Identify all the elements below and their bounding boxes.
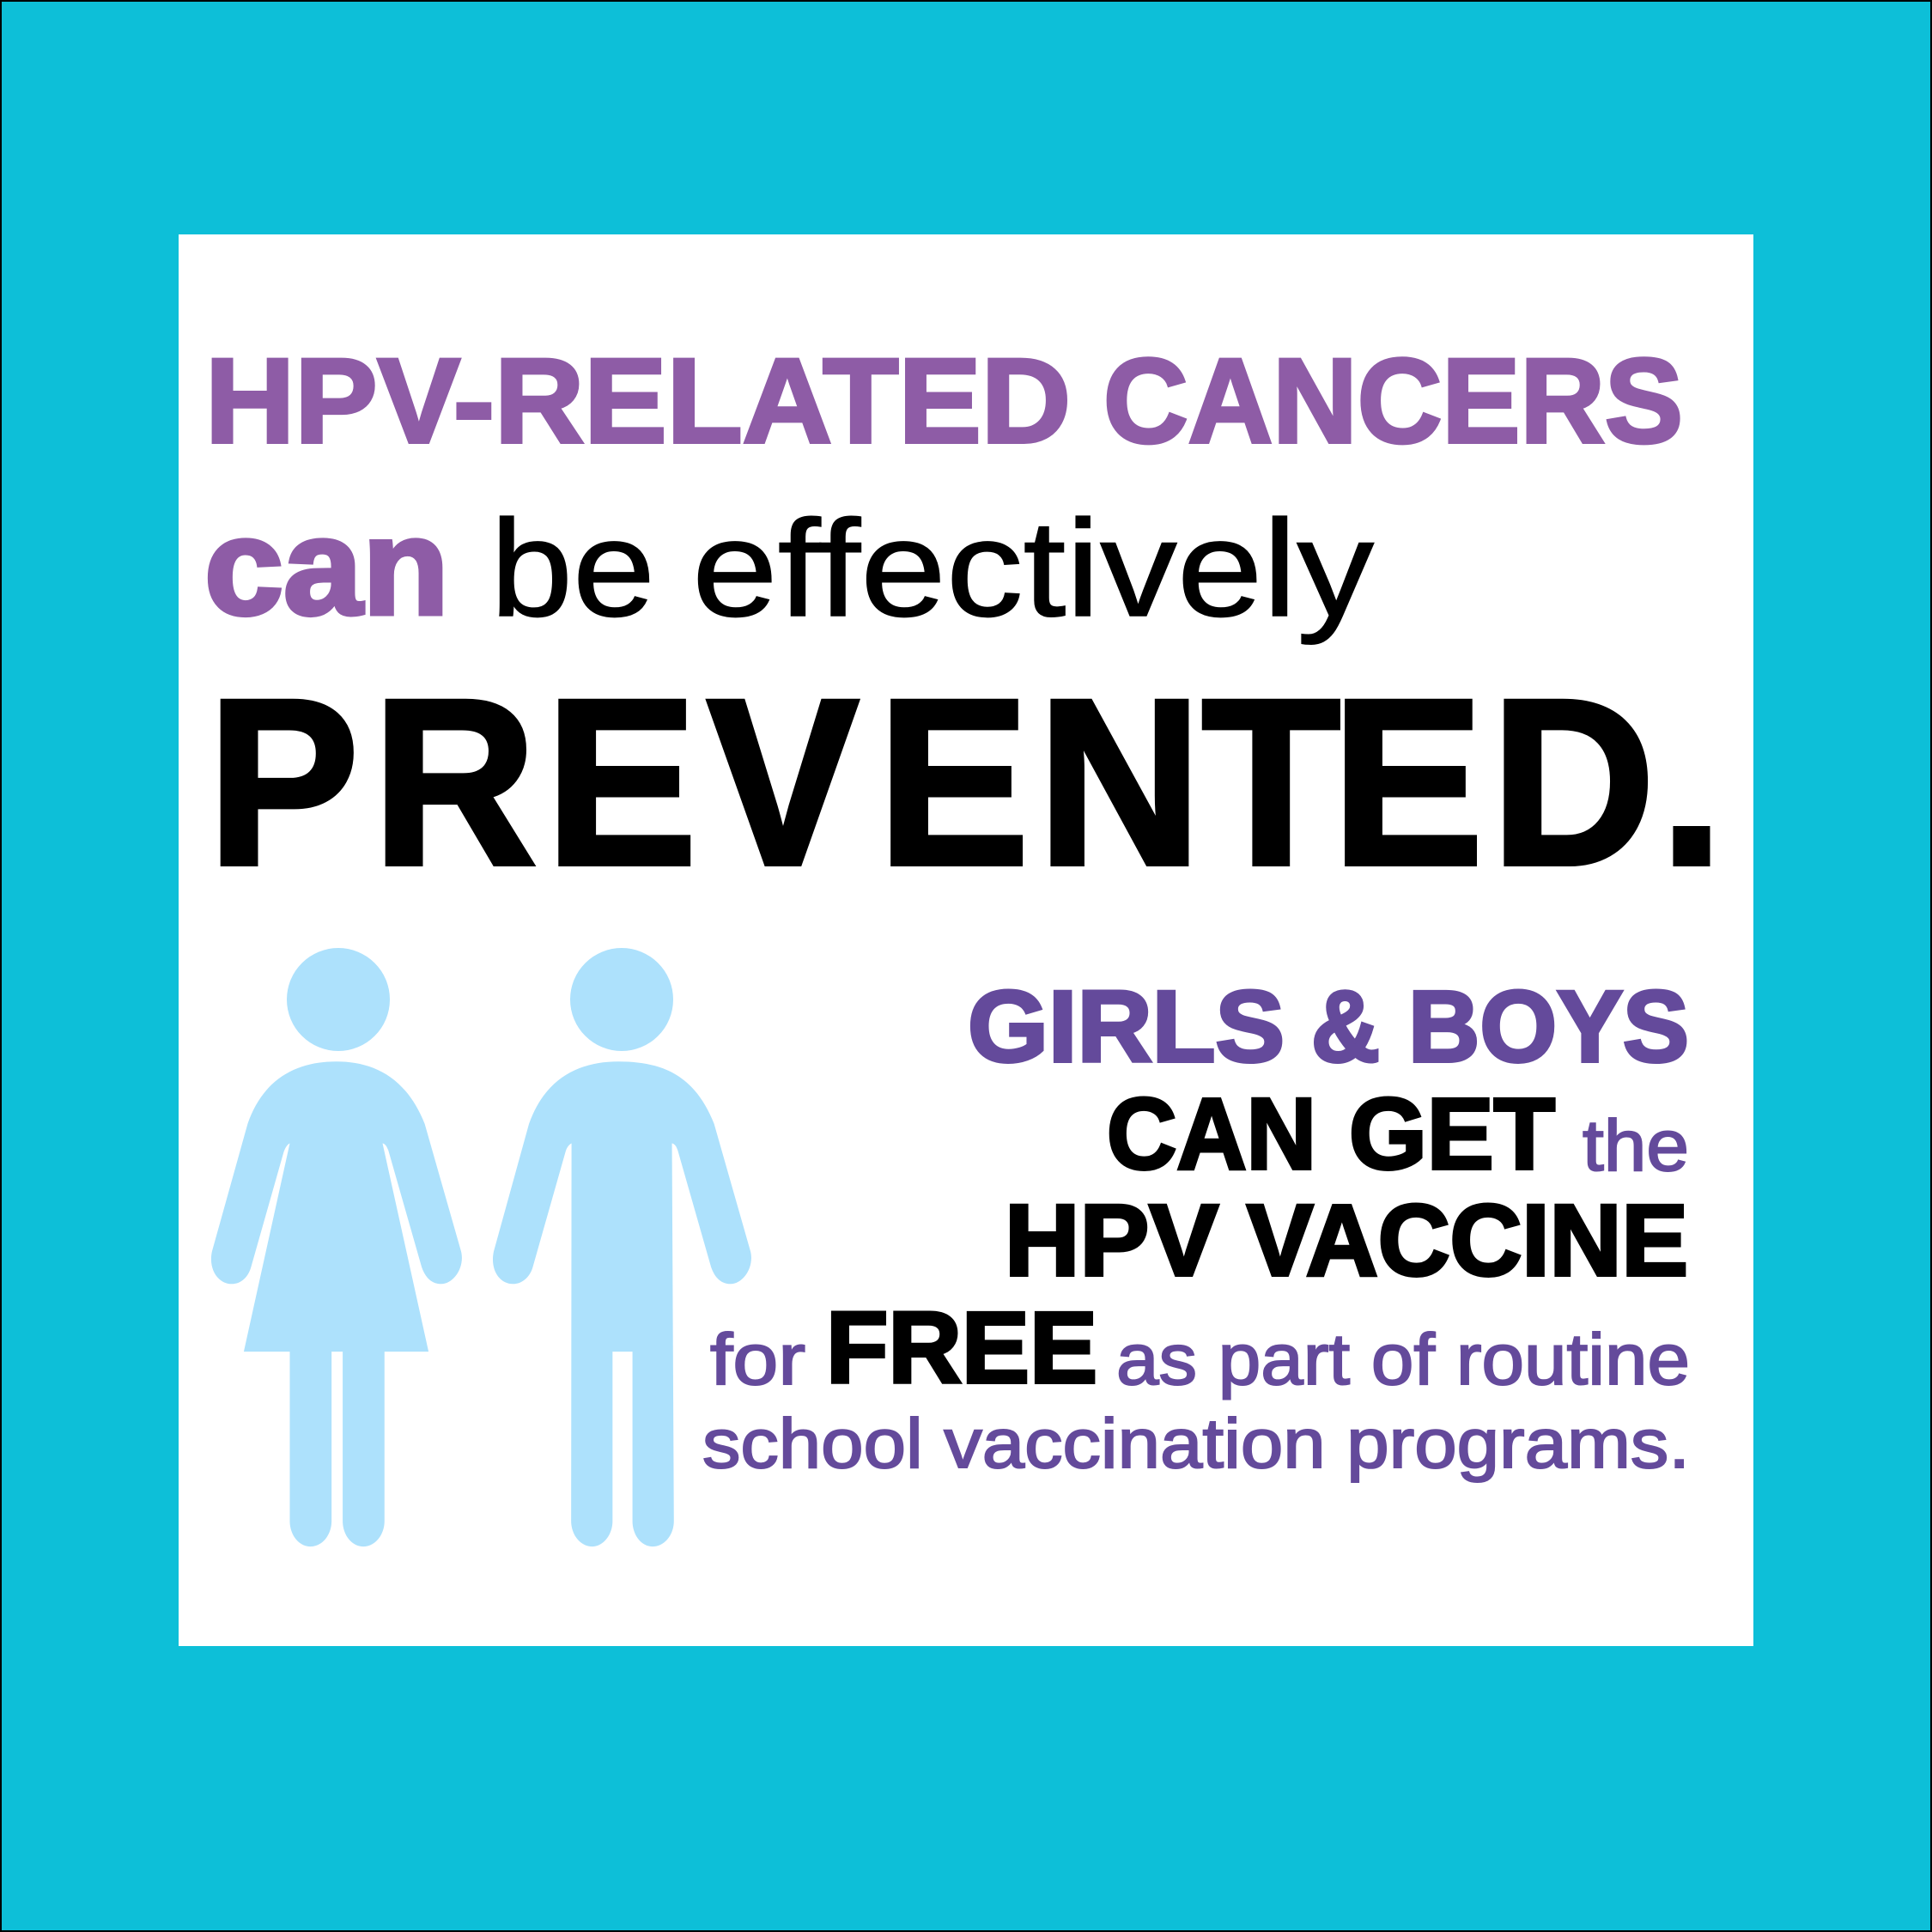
text: HPV vaccine — [1005, 1184, 1688, 1297]
heading: HPV-related cancers — [205, 333, 1683, 468]
heading: can be effectively — [204, 489, 1374, 645]
heading: can be effectively: can — [204, 489, 449, 643]
text: girls and boys: BOYS — [1408, 970, 1689, 1084]
panel: white card — [179, 234, 1753, 1646]
text: for free as part of routine — [710, 1291, 1690, 1405]
heading: can be effectively: be — [490, 491, 655, 645]
text: for free as part of routine: FREE — [826, 1291, 1097, 1405]
text: can get the: GET — [1349, 1078, 1555, 1191]
text: for free as part of routine: as part of routine — [1116, 1319, 1690, 1400]
icon: boy figure — [493, 948, 751, 1546]
text: girls and boys: GIRLS — [968, 970, 1285, 1084]
heading: can be effectively: effectively — [692, 491, 1374, 645]
text: HPV vaccine: HPV — [1005, 1184, 1218, 1297]
text: girls and boys: & — [1311, 970, 1380, 1084]
heading: HPV-related cancers: HPV-RELATED — [205, 333, 1071, 468]
heading: HPV-related cancers: CANCERS — [1103, 333, 1683, 468]
text: for free as part of routine: for — [710, 1319, 805, 1400]
icon: girl and boy figures — [211, 948, 751, 1546]
text: can get the: the — [1583, 1105, 1689, 1186]
text: girls and boys — [968, 970, 1689, 1084]
heading: prevented: PREVENTED. — [208, 651, 1723, 914]
text: can get the: CAN — [1107, 1078, 1316, 1191]
icon: girl figure — [211, 948, 462, 1546]
text: school vaccination programs: school vaccination programs. — [702, 1405, 1690, 1483]
text: HPV vaccine: VACCINE — [1247, 1184, 1688, 1297]
text block: vaccine message — [702, 970, 1690, 1483]
text: can get the — [1107, 1078, 1689, 1191]
